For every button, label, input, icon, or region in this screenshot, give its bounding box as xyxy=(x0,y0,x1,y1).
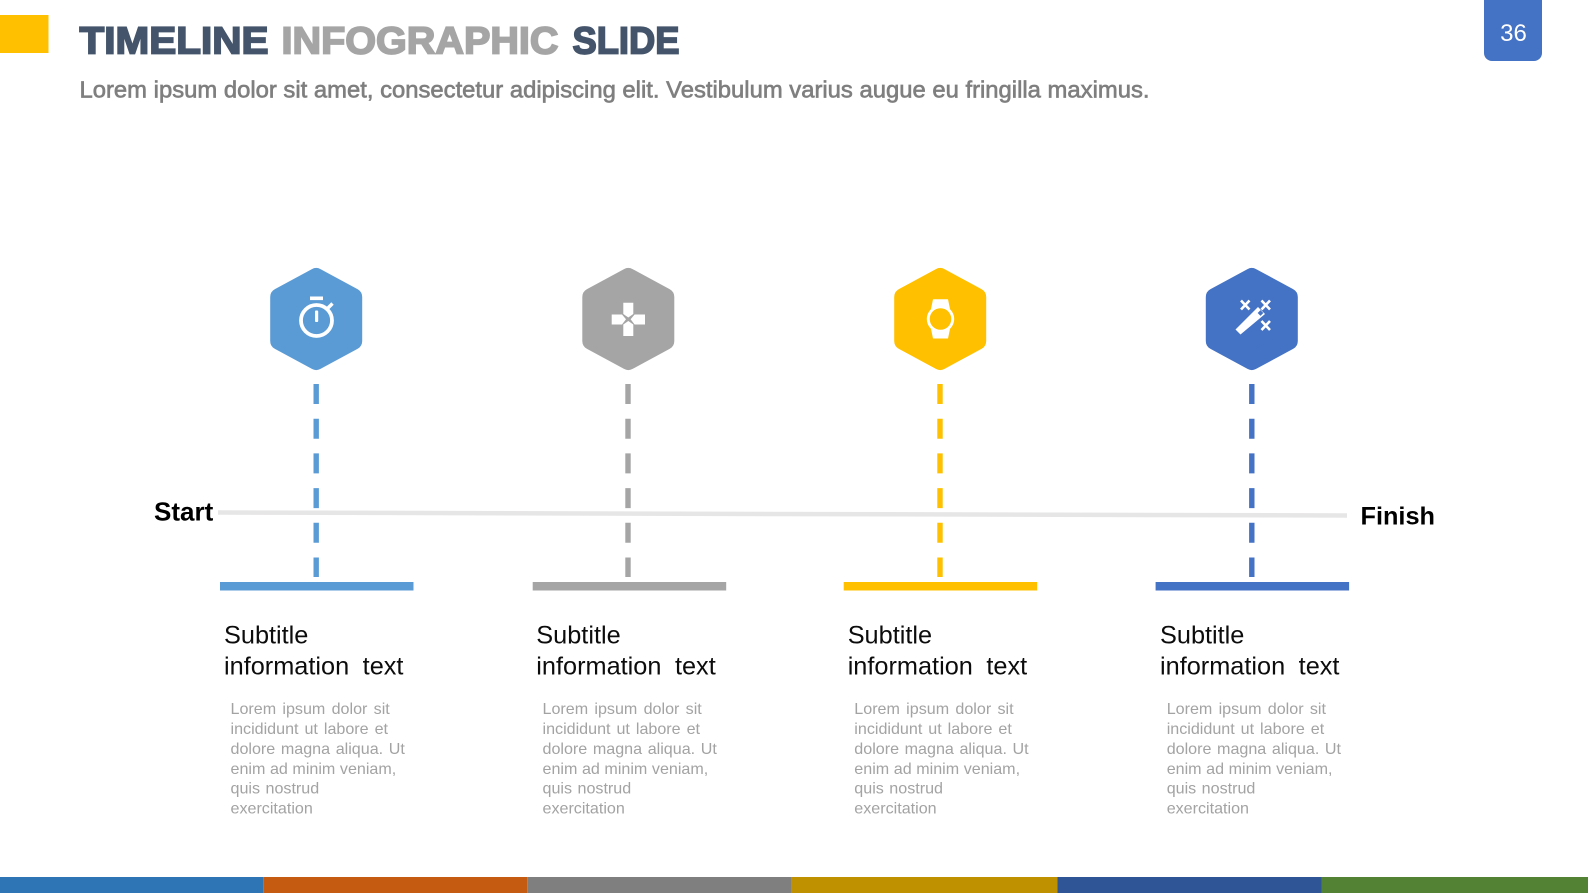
subtitle: Subtitle xyxy=(1160,622,1244,650)
body text: Lorem ipsum dolor sit xyxy=(230,700,390,718)
subtitle: information text xyxy=(848,652,1027,680)
bottom colour strip xyxy=(0,877,1588,893)
body text: enim ad minim veniam, xyxy=(230,760,396,778)
page number badge: 36 xyxy=(1500,20,1527,47)
body text: quis nostrud xyxy=(1167,780,1255,798)
subtitle: information text xyxy=(224,652,403,680)
body text: exercitation xyxy=(1167,800,1249,818)
body text: incididunt ut labore et xyxy=(542,720,701,738)
base bar xyxy=(844,582,1037,590)
title: SLIDE xyxy=(572,20,680,62)
page number badge xyxy=(1484,0,1542,61)
subtitle: information text xyxy=(1160,652,1339,680)
body text: Lorem ipsum dolor sit xyxy=(854,700,1014,718)
accent: yellow square xyxy=(0,15,48,53)
milestone 2 xyxy=(533,277,726,818)
milestone 4 xyxy=(1156,277,1349,818)
body text: quis nostrud xyxy=(230,780,319,798)
body text: enim ad minim veniam, xyxy=(542,760,708,778)
body text: enim ad minim veniam, xyxy=(1167,760,1332,778)
dashed connector xyxy=(1249,384,1255,577)
title xyxy=(80,20,680,62)
title: TIMELINE xyxy=(80,20,268,62)
dashed connector xyxy=(937,384,943,577)
body text: exercitation xyxy=(542,800,625,818)
timeline axis line xyxy=(218,512,1347,516)
body text: dolore magna aliqua. Ut xyxy=(230,740,405,758)
dashed connector xyxy=(314,384,319,577)
body text: enim ad minim veniam, xyxy=(854,760,1020,778)
base bar xyxy=(220,582,414,590)
body text: Lorem ipsum dolor sit xyxy=(1167,700,1326,718)
label: start: Start xyxy=(154,496,214,526)
title: INFOGRAPHIC xyxy=(282,20,558,62)
body text: Lorem ipsum dolor sit xyxy=(542,700,702,718)
icon: wristwatch in yellow hexagon xyxy=(903,277,977,361)
subtitle: Subtitle xyxy=(224,622,308,650)
body text: dolore magna aliqua. Ut xyxy=(854,740,1029,758)
body text: exercitation xyxy=(854,800,937,818)
body text: quis nostrud xyxy=(854,780,943,798)
body text: incididunt ut labore et xyxy=(1167,720,1325,738)
icon: game controller pad in grey hexagon xyxy=(591,277,665,361)
milestone 3 xyxy=(844,277,1037,818)
body text: quis nostrud xyxy=(542,780,631,798)
body text: dolore magna aliqua. Ut xyxy=(1167,740,1342,758)
subtitle: information text xyxy=(536,652,716,680)
body text: incididunt ut labore et xyxy=(854,720,1012,738)
body text: incididunt ut labore et xyxy=(230,720,389,738)
label: finish: Finish xyxy=(1360,502,1435,530)
subtitle: Subtitle xyxy=(848,622,932,650)
base bar xyxy=(1156,582,1349,590)
dashed connector xyxy=(625,384,631,577)
body text: exercitation xyxy=(230,800,313,818)
base bar xyxy=(533,582,726,590)
milestone 1 xyxy=(220,277,414,818)
subtitle: Subtitle xyxy=(536,622,621,650)
icon: magic wand in dark blue hexagon xyxy=(1215,277,1289,361)
body text: dolore magna aliqua. Ut xyxy=(542,740,717,758)
icon: stopwatch in blue hexagon xyxy=(279,277,353,361)
subtitle text: Lorem ipsum dolor sit amet, consectetur adipiscing elit. Vestibulum varius augue eu fringilla maximus. xyxy=(80,76,1150,102)
